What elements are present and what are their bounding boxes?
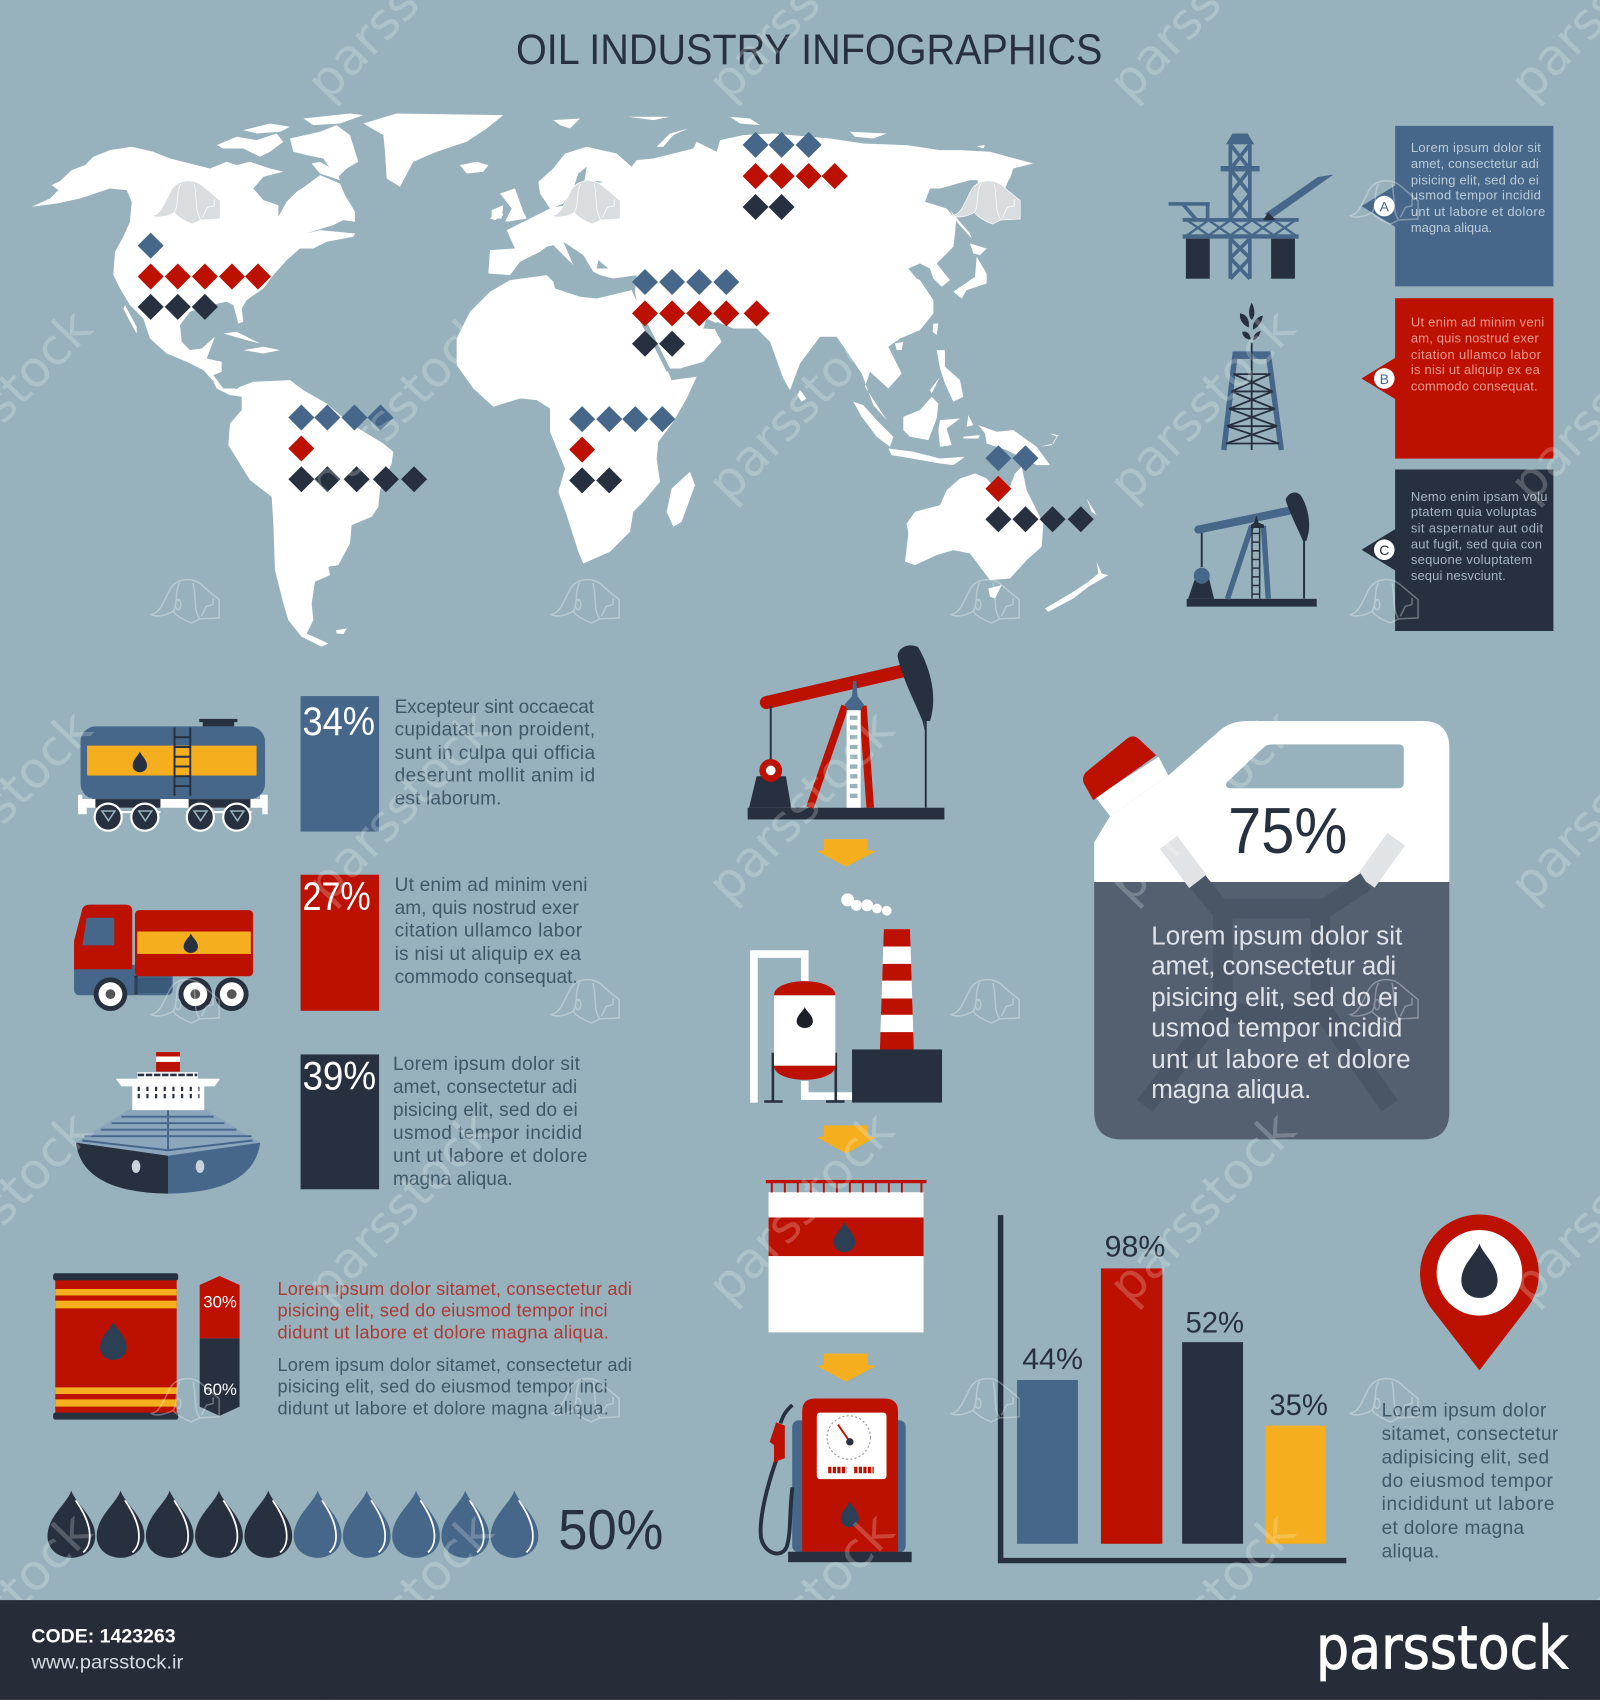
panel A text: usmod tempor incidid [1411,188,1541,203]
bar 35%: 35% [1269,1390,1328,1422]
text: ship: Lorem ipsum dolor sit [393,1054,581,1075]
text: truck: Ut enim ad minim veni [395,875,588,896]
panel A [1362,126,1553,286]
bar 98%: 98% [1105,1232,1165,1264]
bar 52%: 52% [1185,1307,1244,1339]
icon: fuel pump [761,1399,912,1562]
text: rail: sunt in culpa qui officia [395,743,596,764]
icon: small pump jack [1187,493,1317,607]
map: South America [213,380,393,647]
watermarks: parsstock [1097,298,1307,512]
bar 98% [1101,1232,1165,1544]
gauge 30/60: 30% [203,1292,237,1311]
footer bar [0,1600,1600,1700]
stat bar 39%: 39% [302,1055,376,1099]
panel A text: unt ut labore et dolore [1411,204,1545,219]
text: chart: do eiusmod tempor [1382,1471,1553,1492]
text: rail: cupidatat non proident, [395,720,595,741]
icon: refinery [754,893,942,1103]
panel A text: pisicing elit, sed do ei [1411,172,1539,187]
text: truck: am, quis nostrud exer [395,898,580,919]
text: truck: is nisi ut aliquip ex ea [395,944,581,965]
jerrycan text: magna aliqua. [1151,1074,1311,1104]
jerrycan X emboss: upper [1169,839,1396,881]
jerrycan text: amet, consectetur adi [1151,951,1396,981]
map: seas cut-outs [555,167,723,379]
text: ship: unt ut labore et dolore [393,1146,588,1167]
map markers: blue diamonds [138,132,1038,471]
watermarks: parsstock [696,700,906,913]
bar 35% [1265,1390,1328,1544]
arrow 3 [817,1354,876,1382]
watermarks: parsstock [1097,700,1307,913]
panel C text: sit aspernatur aut odit [1411,520,1543,535]
badge B [1374,368,1395,389]
jerrycan text: unt ut labore et dolore [1151,1044,1411,1074]
gauge 30/60: 60% [203,1380,237,1399]
watermarks: parsstock [295,700,504,913]
panel A text: amet, consectetur adi [1411,156,1539,171]
text: truck: citation ullamco labor [395,921,583,942]
text: rail: deserunt mollit anim id [395,766,595,787]
text: chart: Lorem ipsum dolor [1382,1401,1547,1422]
stat bar 34%: 34% [302,700,375,744]
text: rail: est laborum. [395,788,501,809]
text: chart: aliqua. [1382,1541,1439,1562]
footer code: CODE: 1423263 [31,1626,176,1647]
icon: offshore rig [1169,133,1333,279]
icon: storage tank [766,1180,927,1332]
text: grey paragraph: pisicing elit, sed do eiusmod tempor inci [278,1377,608,1397]
drop meter [47,1491,538,1558]
badge A [1374,196,1395,216]
panel B text: is nisi ut aliquip ex ea [1411,362,1541,377]
panel B text: am, quis nostrud exer [1411,331,1539,346]
panel C text: ptatem quia voluptas [1411,504,1537,519]
panel C text: sequi nesvciunt. [1411,568,1506,583]
title: OIL INDUSTRY INFOGRAPHICS [516,26,1102,73]
watermarks: parsstock [696,1101,906,1314]
jerrycan X emboss: lower [1145,881,1390,1106]
text: truck: commodo consequat. [395,967,578,988]
chimney [880,929,914,1049]
icon: location pin [1420,1214,1539,1370]
bar chart [998,1215,1346,1563]
footer logo: parsstock [1316,1614,1569,1683]
icon: jerrycan [1083,721,1449,1139]
jerrycan text: pisicing elit, sed do ei [1151,982,1398,1012]
panel B text: commodo consequat. [1411,378,1538,393]
text: red paragraph: pisicing elit, sed do eiusmod tempor inci [278,1301,608,1321]
watermarks: parsstock [1097,1101,1307,1314]
text: chart: incididunt ut labore [1382,1494,1554,1515]
panel B text: Ut enim ad minim veni [1411,314,1544,329]
badge C: C [1379,542,1389,558]
map: Americas and Greenland [32,113,527,395]
map: Indonesia and Oceania [853,397,1108,612]
map markers: red diamonds [138,163,1011,502]
bar 44%: 44% [1022,1344,1083,1376]
icon: oil tanker ship [76,1052,260,1194]
panel C [1362,470,1553,631]
stat bar 39% [301,1054,379,1189]
text: grey paragraph: didunt ut labore et dolore magna aliqua. [278,1398,609,1418]
icon: oil barrel [53,1273,178,1420]
smoke [841,893,892,916]
stat bar 34% [301,696,379,832]
text: ship: amet, consectetur adi [393,1077,577,1098]
icon: tanker truck [74,905,253,1011]
text: ship: pisicing elit, sed do ei [393,1100,578,1121]
world map [32,113,1108,647]
arrow 2 [817,1125,876,1154]
badge C [1374,539,1395,560]
badge A: A [1380,199,1390,215]
icon: rail tank car [78,719,268,831]
drop meter value: 50% [558,1498,663,1561]
text: red paragraph: Lorem ipsum dolor sitamet, consectetur adi [278,1279,632,1299]
stat bar 27% [301,875,379,1011]
map markers: navy diamonds [138,194,1094,532]
arrow 1 [817,839,876,867]
watermarks: parsstock [295,298,504,512]
text: grey paragraph: Lorem ipsum dolor sitamet, consectetur adi [278,1355,632,1375]
text: chart: adipisicing elit, sed [1382,1448,1549,1469]
text: ship: usmod tempor incidid [393,1123,582,1144]
text: red paragraph: didunt ut labore et dolore magna aliqua. [278,1322,609,1342]
icon: pump jack (process step 1) [748,645,944,819]
text: rail: Excepteur sint occaecat [395,697,595,718]
panel C text: Nemo enim ipsam volu [1411,489,1547,504]
text: chart: et dolore magna [1382,1518,1525,1539]
jerrycan value: 75% [1228,794,1347,867]
badge B: B [1380,371,1389,387]
jerrycan text: Lorem ipsum dolor sit [1151,920,1403,950]
panel C text: sequone voluptatem [1411,552,1532,567]
bar 44% [1017,1344,1083,1544]
panel B [1362,298,1553,459]
panel A text: Lorem ipsum dolor sit [1411,140,1541,155]
text: ship: magna aliqua. [393,1169,513,1190]
panel A text: magna aliqua. [1411,220,1492,235]
map: East Asia islands [797,132,1010,402]
footer url: www.parsstock.ir [30,1652,183,1673]
map: Africa and Eurasia [457,117,1033,563]
jerrycan text: usmod tempor incidid [1151,1012,1402,1042]
gauge 30/60 [200,1276,240,1416]
text: chart: sitamet, consectetur [1382,1424,1559,1445]
bar 52% [1182,1307,1244,1544]
icon: oil derrick with gusher [1224,303,1281,450]
stat bar 27%: 27% [302,875,371,919]
watermarks: parsstock [696,298,906,512]
panel B text: citation ullamco labor [1411,347,1542,362]
panel C text: aut fugit, sed quia con [1411,537,1542,552]
watermarks: parsstock [295,1101,504,1314]
